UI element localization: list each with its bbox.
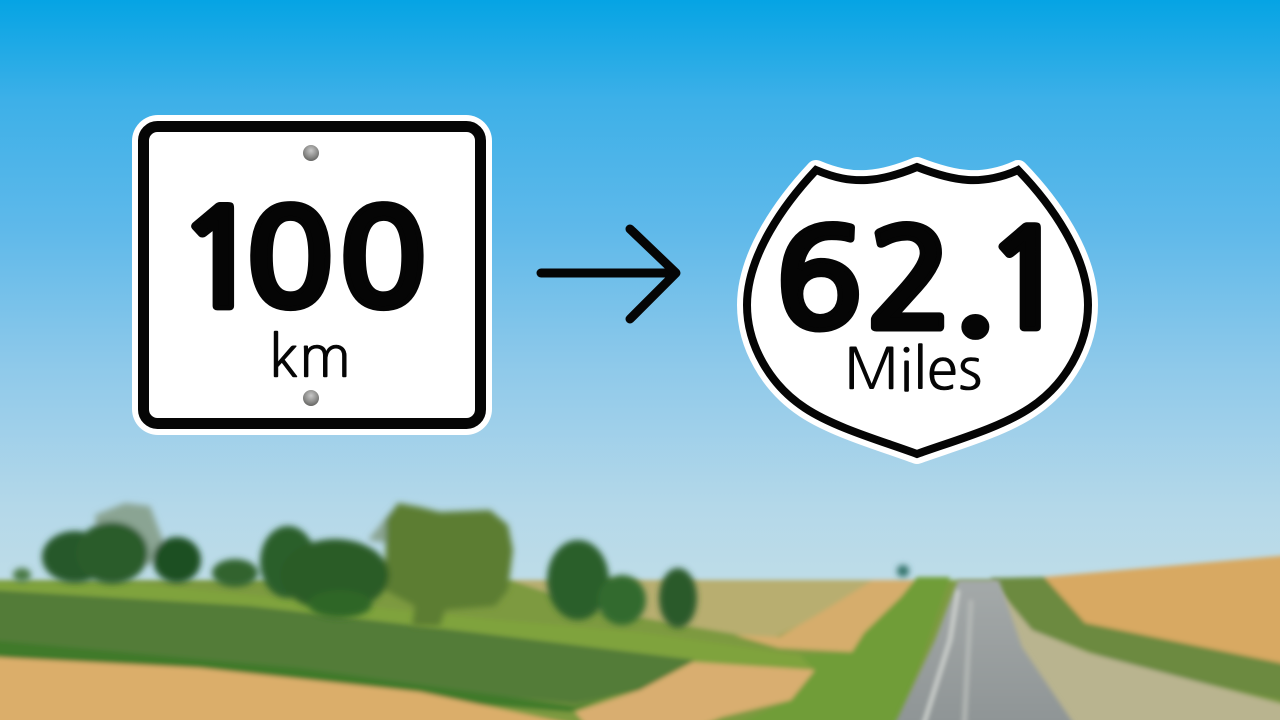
top bolt — [303, 145, 319, 161]
sign plate — [132, 115, 492, 435]
km sign — [132, 115, 492, 435]
unit Miles: Miles — [844, 341, 982, 398]
arrow — [541, 229, 676, 319]
miles shield sign — [747, 167, 1088, 454]
road — [892, 580, 1078, 720]
number 62.1: 62.1 — [774, 214, 1072, 350]
trees — [13, 503, 909, 628]
shield shape — [747, 167, 1088, 454]
number 100: 100 — [175, 194, 428, 328]
unit km: km — [269, 328, 351, 386]
background: countryside landscape — [0, 503, 1280, 720]
bottom bolt — [303, 390, 319, 406]
